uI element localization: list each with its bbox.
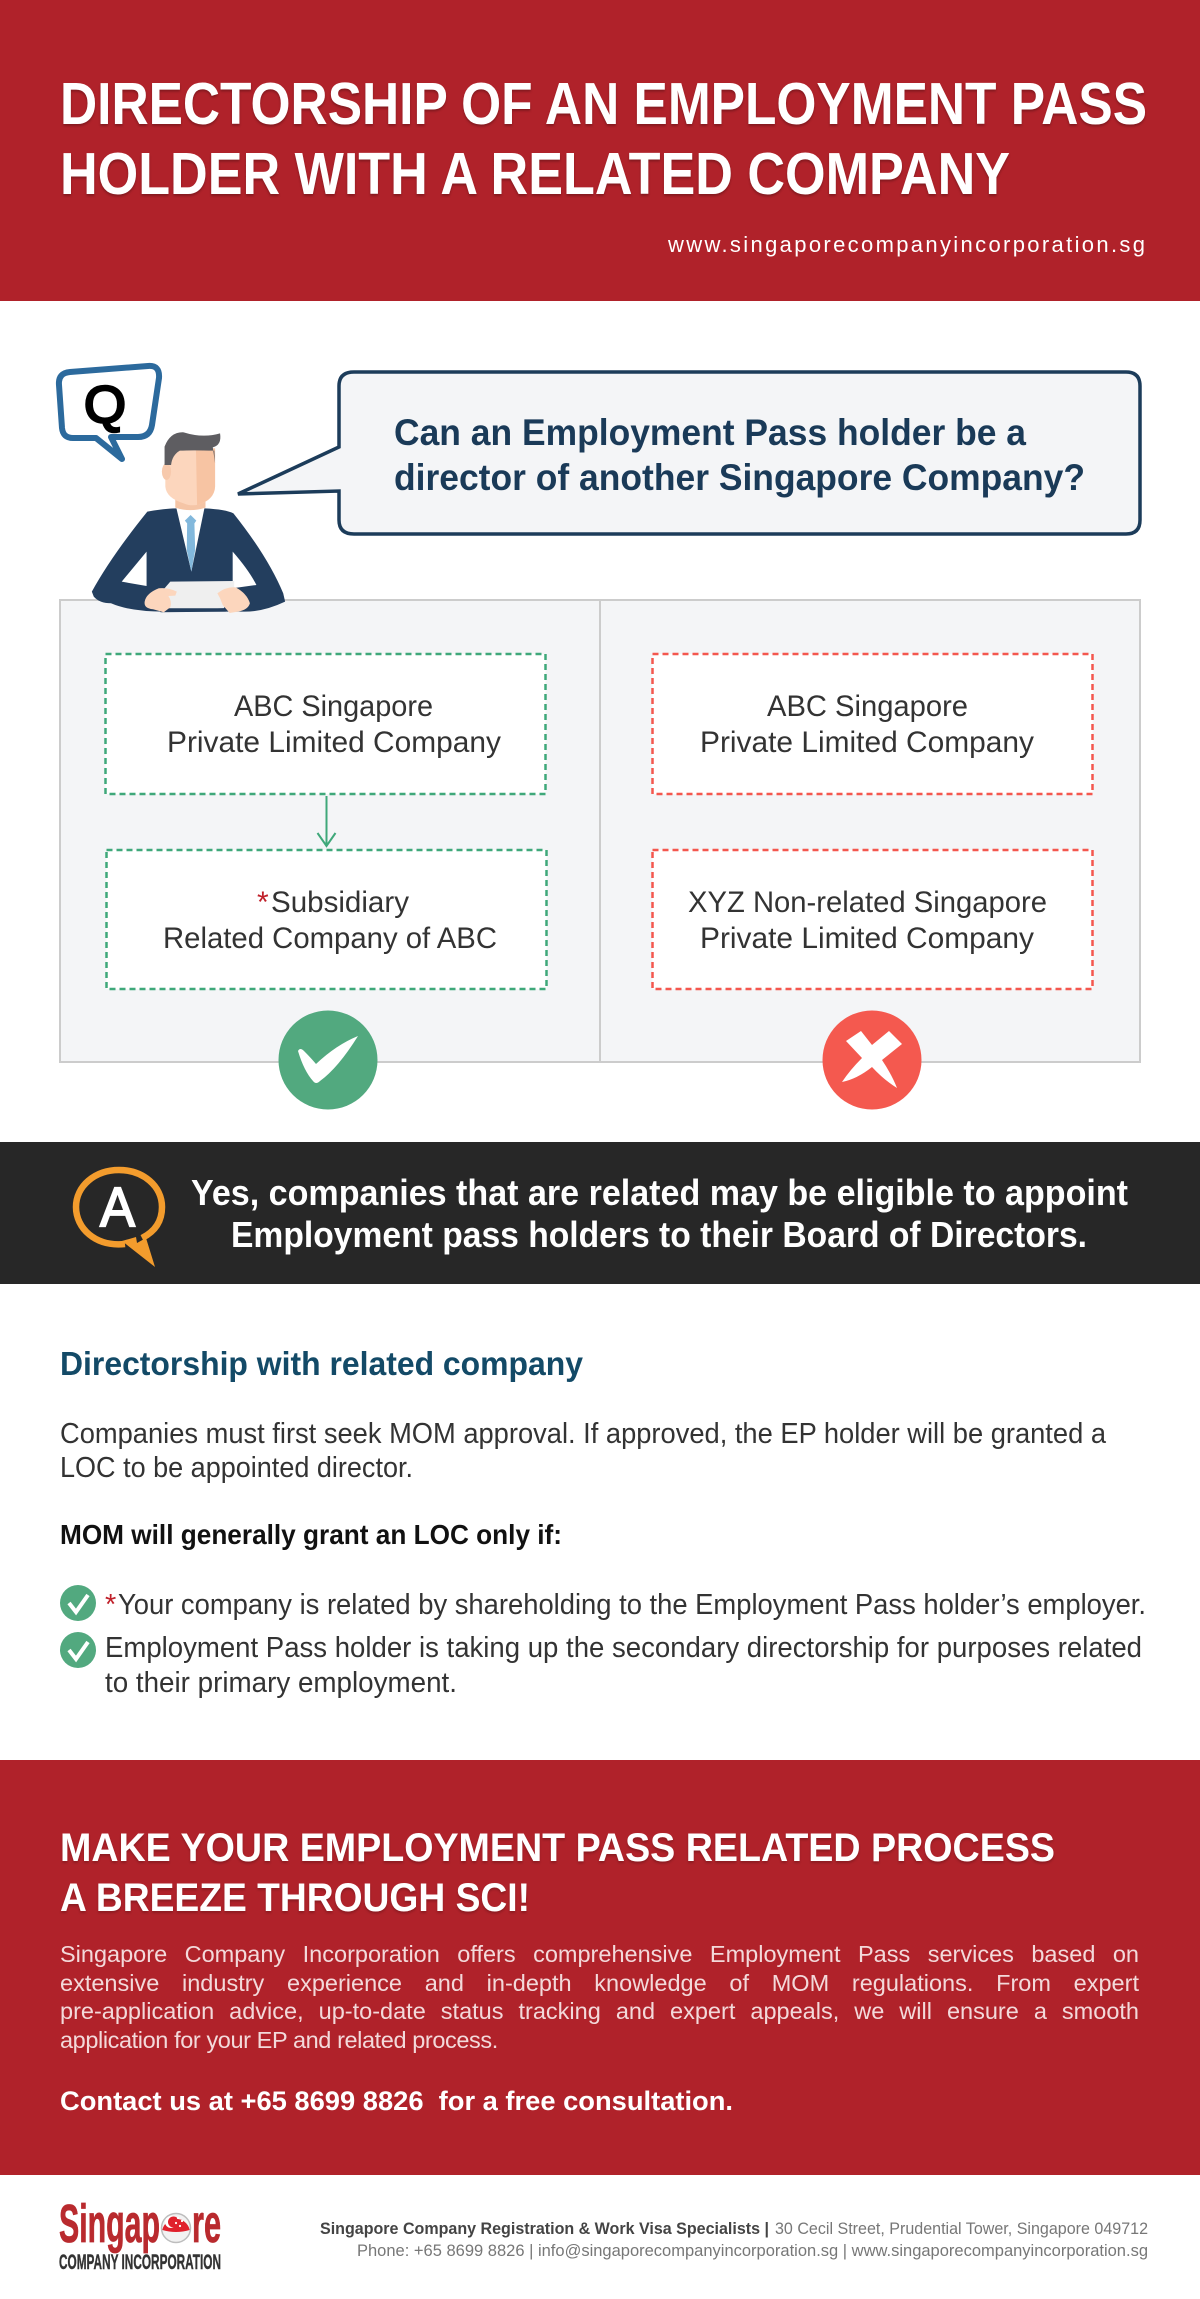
call to action heading [60,1826,1055,1920]
icon: Q bubble: Q [84,376,126,434]
condition 1: Your company is related by shareholding to the Employment Pass holder’s employer. [118,1589,1146,1621]
answer text: Yes, companies that are related may be eligible to appoint [191,1172,1128,1213]
call to action heading: A BREEZE THROUGH SCI! [60,1876,530,1920]
box: subsidiary: * [257,886,269,919]
footer contact details: Phone: +65 8699 8826 | info@singaporecompanyincorporation.sg | www.singaporecompanyincorporation.sg [357,2242,1148,2260]
ear [162,463,171,480]
icon: A bubble: A [100,1175,136,1238]
box: subsidiary: Related Company of ABC [163,922,497,955]
box: ABC Singapore (related) [106,654,546,794]
intro paragraph [60,1418,1107,1484]
contact line: Contact us at +65 8699 8826 for a free consultation. [60,2086,733,2116]
condition 2: Employment Pass holder is taking up the secondary directorship for purposes related [105,1632,1142,1664]
call to action paragraph [60,1940,1139,2053]
header banner [0,0,1200,301]
question text: director of another Singapore Company? [394,457,1085,498]
box: ABC Singapore (related): Private Limited Company [167,726,501,759]
jacket [92,508,285,612]
intro paragraph: LOC to be appointed director. [60,1452,413,1484]
question text: Can an Employment Pass holder be a [394,412,1026,453]
section: directorship with related company [60,1345,1146,1699]
footer logo: COMPANY INCORPORATION [59,2251,221,2274]
call to action paragraph: application for your EP and related process. [60,2026,498,2052]
hands [145,588,177,612]
question text [394,412,1085,498]
icon: red cross [822,1010,922,1110]
section heading: Directorship with related company [60,1345,584,1382]
title: HOLDER WITH A RELATED COMPANY [60,141,1010,207]
box: ABC Singapore (non-related) [652,654,1092,794]
tablet [165,581,234,608]
condition 2 [60,1632,1142,1699]
footer contact details: 30 Cecil Street, Prudential Tower, Singapore 049712 [775,2220,1148,2238]
icon: green check [278,1010,378,1110]
answer text [191,1172,1128,1255]
call to action paragraph: Singapore Company Incorporation offers comprehensive Employment Pass services based on [60,1940,1139,1966]
comparison panel [60,600,1140,1110]
box: XYZ non-related: Private Limited Company [700,922,1034,955]
footer contact details: Singapore Company Registration & Work Visa Specialists | [320,2220,769,2238]
arm gaps [122,552,256,588]
icon: A bubble [76,1170,162,1267]
neck [175,493,206,510]
condition 2: to their primary employment. [105,1667,457,1699]
call to action paragraph: pre-application advice, up-to-date status tracking and expert appeals, we will ensure a smooth [60,1998,1139,2024]
box: XYZ non-related: XYZ Non-related Singapore [688,886,1047,919]
title [60,71,1147,207]
call to action band [0,1760,1200,2175]
box: subsidiary: Subsidiary [271,886,409,919]
footer contact details [320,2220,1148,2260]
hair [165,432,220,465]
icon: Q bubble [59,366,159,459]
box: ABC Singapore (non-related): Private Limited Company [700,726,1034,759]
call to action paragraph: extensive industry experience and in-depth knowledge of MOM regulations. From expert [60,1970,1139,1996]
answer text: Employment pass holders to their Board of Directors. [231,1214,1087,1255]
call to action heading: MAKE YOUR EMPLOYMENT PASS RELATED PROCESS [60,1826,1055,1870]
face [165,448,215,505]
illustration: businessman [92,432,285,613]
website url: www.singaporecompanyincorporation.sg [667,232,1145,257]
intro paragraph: Companies must first seek MOM approval. If approved, the EP holder will be granted a [60,1418,1107,1450]
conditions heading: MOM will generally grant an LOC only if: [60,1519,562,1550]
shirt [176,507,205,572]
tie [185,515,196,572]
arrow: ABC to subsidiary [318,796,336,846]
box: ABC Singapore (related): ABC Singapore [234,690,433,723]
icon: Singapore flag circle [162,2214,190,2242]
box: XYZ non-related [652,850,1092,989]
footer logo: re [192,2194,221,2254]
box: ABC Singapore (non-related): ABC Singapore [767,690,968,723]
footer logo: Singap [59,2194,160,2254]
condition 1: * [105,1589,116,1621]
footer logo [59,2194,221,2274]
box: subsidiary [106,850,546,989]
answer band [0,1142,1200,1284]
question speech bubble [238,372,1140,534]
